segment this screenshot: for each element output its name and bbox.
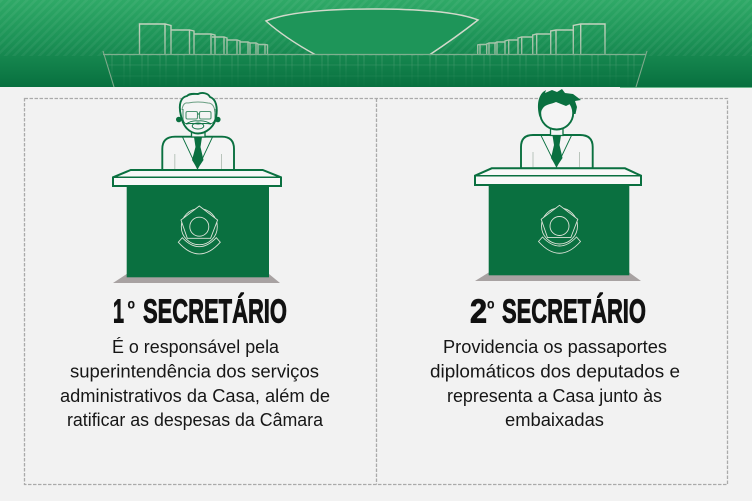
panel: dashed frame xyxy=(24,98,728,484)
lectern top xyxy=(475,168,641,185)
icon: dome xyxy=(266,9,478,54)
text block: second secretary description: diplomáticos dos deputados e xyxy=(430,360,680,382)
icon: dark haired man xyxy=(521,89,593,168)
icon: coat of arms xyxy=(538,205,580,253)
lectern body xyxy=(489,185,629,275)
text block: first secretary description: ratificar as despesas da Câmara xyxy=(67,409,324,430)
text block: first secretary description: superintendência dos serviços xyxy=(70,360,319,382)
heading: 1º secretário xyxy=(113,292,287,330)
text block: second secretary description: Providencia os passaportes xyxy=(443,336,667,357)
heading: 2º secretário xyxy=(470,292,646,330)
heading: 1º secretário: 1 xyxy=(113,293,124,330)
figure: second secretary at lectern xyxy=(475,89,641,281)
lectern top xyxy=(113,170,281,186)
icon: right towers xyxy=(478,24,605,54)
header banner: Congress building xyxy=(0,0,752,88)
heading: 2º secretário: 2 xyxy=(470,293,487,330)
lectern shadow xyxy=(475,272,641,281)
icon: coat of arms xyxy=(178,206,220,254)
text block: second secretary description: embaixadas xyxy=(505,409,604,430)
text block: second secretary description: representa a Casa junto às xyxy=(447,385,662,406)
icon: bearded man with glasses xyxy=(162,93,234,170)
heading: 2º secretário: o xyxy=(487,295,494,311)
figure: first secretary at lectern xyxy=(113,93,281,283)
heading: 2º secretário: SECRETÁRIO xyxy=(502,292,646,330)
text block: first secretary description xyxy=(60,336,330,430)
heading: 1º secretário: o xyxy=(128,295,135,311)
icon: left towers xyxy=(140,24,268,54)
text block: first secretary description: É o responsável pela xyxy=(112,336,280,357)
text block: second secretary description xyxy=(430,336,680,430)
lectern body xyxy=(127,186,269,277)
icon: platform xyxy=(103,51,647,87)
text block: first secretary description: administrativos da Casa, além de xyxy=(60,385,330,406)
heading: 1º secretário: SECRETÁRIO xyxy=(143,292,287,330)
lectern shadow xyxy=(113,274,280,283)
